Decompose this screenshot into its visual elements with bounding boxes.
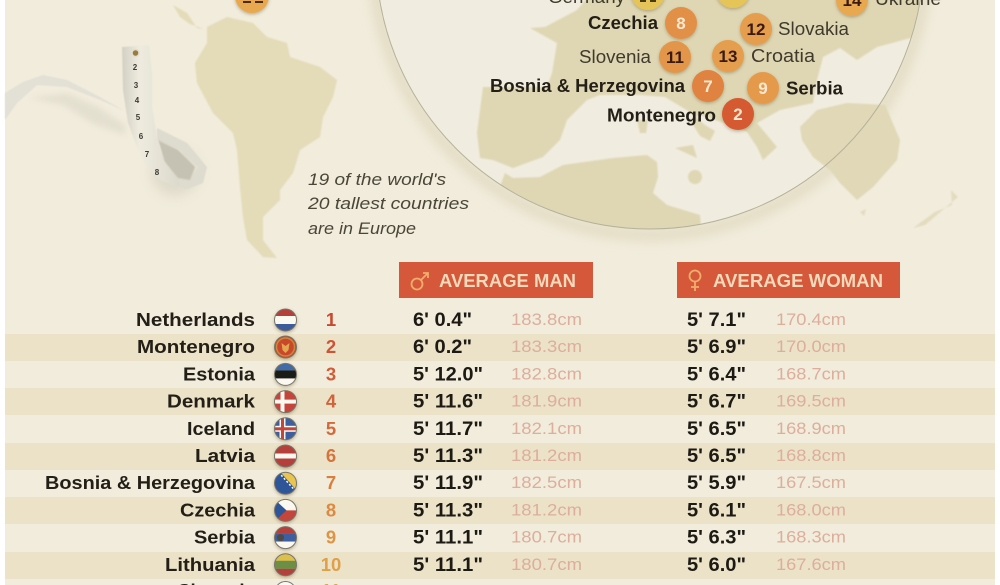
row: Serbia: 5' 11.1" bbox=[413, 528, 483, 549]
row: Latvia bbox=[195, 445, 846, 467]
row: Montenegro: 6' 0.2" bbox=[413, 337, 472, 358]
tape numbers bbox=[133, 63, 160, 177]
map: shadow around europe circle bbox=[374, 0, 926, 235]
row: Montenegro: 183.3cm bbox=[511, 338, 582, 356]
row: Netherlands: 183.8cm bbox=[511, 311, 582, 329]
map label: Croatia bbox=[712, 40, 816, 72]
map label: Serbia: Serbia bbox=[786, 78, 844, 98]
row: Iceland: 5 bbox=[326, 418, 336, 439]
flag: Latvia bbox=[274, 445, 296, 467]
row: Bosnia and Herzegovina: 5' 11.9" bbox=[413, 473, 483, 494]
icon: female symbol bbox=[690, 270, 700, 291]
row: Czechia: 181.2cm bbox=[511, 501, 582, 519]
heading: average woman bbox=[677, 262, 900, 298]
tape numbers: 2 bbox=[133, 63, 138, 72]
map label: Montenegro: 2 bbox=[733, 105, 743, 124]
row: Serbia: Serbia bbox=[194, 527, 256, 548]
tape numbers: 5 bbox=[136, 113, 141, 122]
row: Iceland: Iceland bbox=[187, 418, 255, 439]
tape loop bbox=[157, 128, 207, 189]
flag: Estonia bbox=[274, 363, 296, 385]
row: Denmark: 181.9cm bbox=[511, 393, 582, 411]
row: Estonia: 3 bbox=[326, 363, 336, 384]
row: Serbia: 180.7cm bbox=[511, 529, 582, 547]
row: Latvia: 5' 6.5" bbox=[687, 446, 746, 467]
map label: Slovenia bbox=[579, 41, 691, 73]
europe and africa land bbox=[477, 0, 940, 240]
row: Denmark: 169.5cm bbox=[776, 393, 846, 411]
row: Bosnia and Herzegovina: 167.5cm bbox=[776, 474, 846, 492]
map label: Serbia bbox=[747, 72, 844, 104]
callout: 19 of 20 tallest: are in Europe bbox=[308, 219, 416, 238]
row: Iceland: 5' 6.5" bbox=[687, 419, 746, 440]
row: Iceland bbox=[187, 418, 846, 440]
map: europe circle bbox=[376, 0, 940, 240]
callout: 19 of 20 tallest bbox=[307, 170, 470, 238]
row: Latvia: 5' 11.3" bbox=[413, 446, 483, 467]
map label: Bosnia and Herzegovina: Bosnia & Herzegovina bbox=[490, 76, 686, 96]
row: Denmark: 5' 6.7" bbox=[687, 392, 746, 413]
heading: average woman: AVERAGE WOMAN bbox=[713, 271, 883, 291]
flag: Bosnia and Herzegovina bbox=[274, 472, 296, 494]
row: Serbia: 168.3cm bbox=[776, 529, 846, 547]
row: Montenegro: 2 bbox=[326, 336, 336, 357]
flag: Netherlands bbox=[274, 309, 296, 331]
tape measure bbox=[5, 45, 207, 196]
map label: Bosnia and Herzegovina: 7 bbox=[703, 77, 713, 96]
map label: Czechia: Czechia bbox=[588, 13, 659, 33]
row: Netherlands: 170.4cm bbox=[776, 311, 846, 329]
row: Estonia: 182.8cm bbox=[511, 365, 582, 383]
row: Denmark bbox=[167, 391, 846, 413]
map marker: upper centre bbox=[716, 0, 750, 8]
tape numbers: 6 bbox=[139, 132, 144, 141]
row: Netherlands: 6' 0.4" bbox=[413, 310, 472, 331]
row: Bosnia and Herzegovina: Bosnia & Herzegovina bbox=[45, 472, 256, 493]
row: Estonia: 168.7cm bbox=[776, 365, 846, 383]
row: Latvia: 168.8cm bbox=[776, 447, 846, 465]
row: Czechia: 5' 11.3" bbox=[413, 500, 483, 521]
row: Montenegro bbox=[137, 336, 846, 358]
flag: Serbia bbox=[274, 527, 296, 549]
row: Iceland: 168.9cm bbox=[776, 420, 846, 438]
row: Serbia: 5' 6.3" bbox=[687, 528, 746, 549]
row: Serbia bbox=[194, 527, 846, 549]
row: Bosnia and Herzegovina bbox=[45, 472, 846, 494]
marker: americas bbox=[235, 0, 269, 13]
map label: Slovakia: Slovakia bbox=[778, 19, 850, 39]
row: Czechia: 168.0cm bbox=[776, 501, 846, 519]
tape numbers: 8 bbox=[155, 168, 160, 177]
tape numbers: 3 bbox=[134, 81, 139, 90]
row: Latvia: 181.2cm bbox=[511, 447, 582, 465]
map label: Slovakia bbox=[740, 13, 850, 45]
heading: average man: AVERAGE MAN bbox=[439, 271, 576, 291]
row: Denmark: Denmark bbox=[167, 391, 256, 412]
tape numbers: 7 bbox=[145, 150, 150, 159]
map label: Montenegro: Montenegro bbox=[607, 106, 716, 126]
map label: Ukraine bbox=[836, 0, 941, 16]
tape left ribbon bbox=[5, 75, 123, 120]
flag: Montenegro bbox=[274, 336, 296, 358]
map label: Czechia: 8 bbox=[676, 14, 686, 33]
row: Slovenia (cropped) bbox=[178, 580, 341, 585]
row: Netherlands: 5' 7.1" bbox=[687, 310, 746, 331]
row: Estonia: 5' 12.0" bbox=[413, 364, 483, 385]
flag: Lithuania bbox=[274, 554, 296, 576]
map label: Slovenia: 11 bbox=[666, 48, 684, 67]
table row stripes bbox=[5, 334, 995, 579]
row: Iceland: 182.1cm bbox=[511, 420, 582, 438]
row: Estonia bbox=[183, 363, 846, 385]
row: Lithuania: 5' 11.1" bbox=[413, 555, 483, 576]
row: Czechia: 8 bbox=[326, 499, 336, 520]
row: Iceland: 5' 11.7" bbox=[413, 419, 483, 440]
map label: Slovakia: 12 bbox=[747, 20, 765, 39]
row: Netherlands bbox=[136, 309, 846, 331]
map label: Slovenia: Slovenia bbox=[579, 47, 652, 67]
map label: Montenegro bbox=[607, 98, 754, 130]
tape numbers: 4 bbox=[135, 96, 140, 105]
row: Netherlands: Netherlands bbox=[136, 309, 255, 330]
map label: Serbia: 9 bbox=[758, 79, 768, 98]
row: Netherlands: 1 bbox=[326, 309, 336, 330]
callout: 19 of 20 tallest: 19 of the world's bbox=[308, 170, 447, 189]
row: Latvia: 6 bbox=[326, 445, 336, 466]
map label: Bosnia and Herzegovina bbox=[490, 70, 724, 102]
row: Bosnia and Herzegovina: 182.5cm bbox=[511, 474, 582, 492]
row: Bosnia and Herzegovina: 5' 5.9" bbox=[687, 473, 746, 494]
row: Lithuania: 10 bbox=[321, 554, 341, 575]
row: Czechia bbox=[180, 499, 846, 521]
row: Denmark: 5' 11.6" bbox=[413, 392, 483, 413]
row: Estonia: Estonia bbox=[183, 363, 256, 384]
row: Estonia: 5' 6.4" bbox=[687, 364, 746, 385]
flag: Czechia bbox=[274, 499, 296, 521]
map label: Germany bbox=[548, 0, 665, 10]
map: pacific islands bbox=[777, 176, 958, 228]
row: Lithuania: 167.6cm bbox=[776, 556, 846, 574]
row: Montenegro: 5' 6.9" bbox=[687, 337, 746, 358]
map: south and central america bbox=[173, 5, 337, 258]
map label: Croatia: 13 bbox=[719, 47, 737, 66]
callout: 19 of 20 tallest: 20 tallest countries bbox=[307, 194, 470, 213]
row: Denmark: 4 bbox=[326, 391, 337, 412]
row: Lithuania: 5' 6.0" bbox=[687, 555, 746, 576]
row: Montenegro: Montenegro bbox=[137, 336, 255, 357]
circle outline bbox=[376, 0, 924, 229]
row: Czechia: 5' 6.1" bbox=[687, 500, 746, 521]
row: Montenegro: 170.0cm bbox=[776, 338, 846, 356]
icon: male symbol bbox=[412, 273, 428, 290]
tape main strip bbox=[122, 45, 180, 187]
row: Lithuania: Lithuania bbox=[165, 554, 256, 575]
flag: Iceland bbox=[274, 418, 296, 440]
tape button bbox=[132, 50, 139, 56]
row: Bosnia and Herzegovina: 7 bbox=[326, 472, 336, 493]
row: Latvia: Latvia bbox=[195, 445, 256, 466]
heading: average man bbox=[399, 262, 593, 298]
asia land bbox=[800, 103, 900, 200]
row: Czechia: Czechia bbox=[180, 499, 256, 520]
row: Serbia: 9 bbox=[326, 527, 336, 548]
row: Lithuania: 180.7cm bbox=[511, 556, 582, 574]
row: Lithuania bbox=[165, 554, 846, 576]
flag: Denmark bbox=[274, 391, 296, 413]
map label: Croatia: Croatia bbox=[751, 46, 816, 66]
map label: Czechia bbox=[588, 7, 697, 39]
